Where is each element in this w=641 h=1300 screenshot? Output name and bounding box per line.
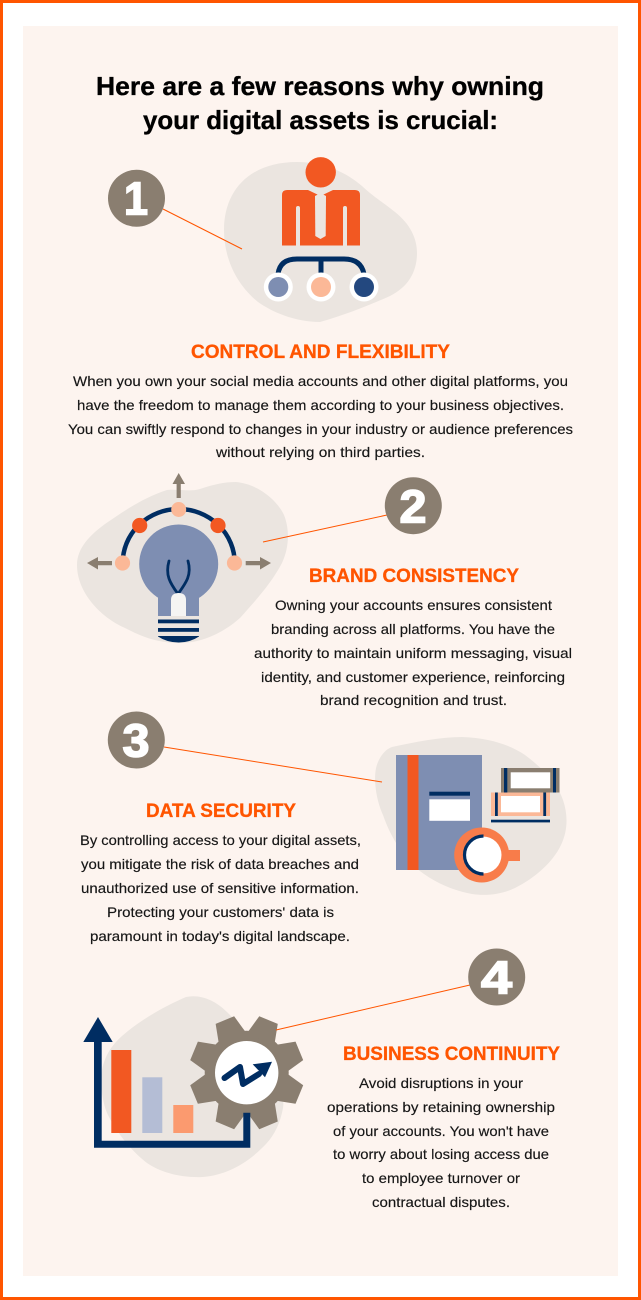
body text 1: You can swiftly respond to changes in your industry or audience preferences (68, 421, 573, 437)
icon: bar chart and gear (83, 996, 305, 1177)
heading: brand consistency: BRAND CONSISTENCY (309, 566, 519, 587)
icon: leader with org chart (224, 157, 417, 322)
section 3: data security (80, 712, 567, 944)
number badge 4 (468, 948, 525, 1006)
body text 1: without relying on third parties. (215, 444, 425, 460)
title: Here are a few reasons why owning (96, 71, 544, 101)
body text 3: you mitigate the risk of data breaches and (81, 856, 359, 872)
title (96, 71, 544, 135)
number badge 3: 3 (122, 714, 150, 766)
body text 3: unauthorized use of sensitive information. (81, 880, 359, 896)
heading: control and flexibility: CONTROL AND FLEXIBILITY (191, 342, 450, 363)
body text 3: paramount in today's digital landscape. (90, 928, 350, 944)
icon: light bulb with arc and arrows (77, 473, 288, 643)
number badge 1 (108, 170, 165, 227)
body text 4: of your accounts. You won't have (333, 1123, 549, 1139)
heading: business continuity: BUSINESS CONTINUITY (343, 1044, 560, 1065)
icon: book, boxes and cup (375, 737, 567, 895)
connector line 4 (276, 985, 470, 1030)
body text 3: Protecting your customers' data is (107, 904, 334, 920)
number badge 2 (385, 477, 442, 534)
body text 2: Owning your accounts ensures consistent (275, 597, 552, 613)
body text 2: brand recognition and trust. (320, 692, 507, 708)
body text 2: authority to maintain uniform messaging, visual (254, 645, 572, 661)
connector line 1 (163, 209, 242, 249)
body text 4: Avoid disruptions in your (359, 1075, 523, 1091)
body text 4: operations by retaining ownership (327, 1099, 555, 1115)
title: your digital assets is crucial: (143, 105, 498, 135)
body text 3 (80, 832, 361, 944)
body text 4: to worry about losing access due (333, 1146, 549, 1162)
body text 2: identity, and customer experience, reinforcing (261, 669, 565, 685)
body text 3: By controlling access to your digital assets, (80, 832, 361, 848)
body text 1: have the freedom to manage them according to your business objectives. (77, 397, 564, 413)
heading: data security: DATA SECURITY (146, 801, 296, 822)
body text 4 (327, 1075, 555, 1210)
number badge 4: 4 (481, 952, 512, 1004)
body text 1: When you own your social media accounts and other digital platforms, you (73, 373, 568, 389)
section 1: control and flexibility (68, 157, 573, 460)
body text 2: branding across all platforms. You have the (271, 621, 555, 637)
number badge 3 (108, 712, 165, 768)
section 2: brand consistency (77, 473, 572, 708)
connector line 2 (263, 515, 387, 542)
section 4: business continuity (83, 948, 560, 1210)
number badge 2: 2 (400, 480, 426, 532)
body text 4: contractual disputes. (372, 1194, 510, 1210)
body text 4: to employee turnover or (362, 1170, 520, 1186)
number badge 1: 1 (124, 172, 148, 224)
body text 1 (68, 373, 573, 460)
body text 2 (254, 597, 572, 708)
connector line 3 (164, 747, 382, 782)
